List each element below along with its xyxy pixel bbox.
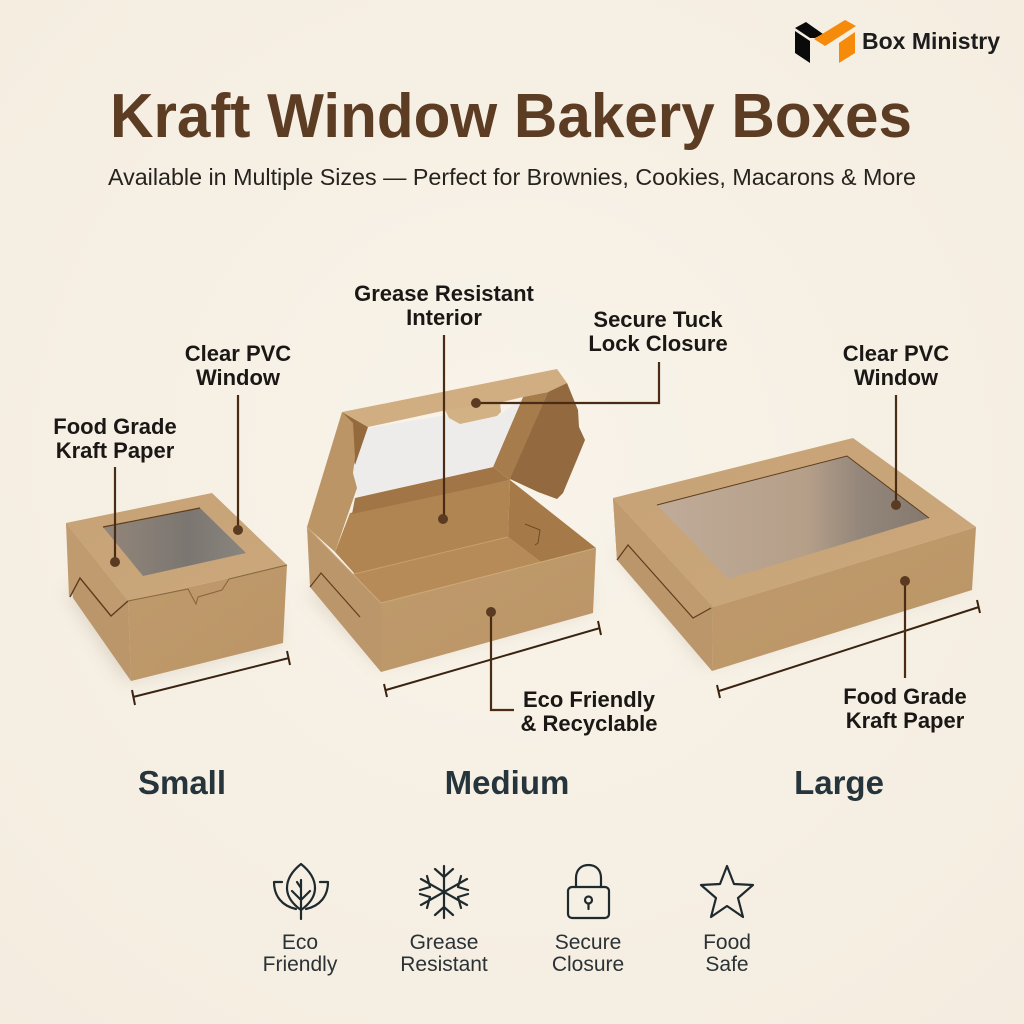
dimension line: small bbox=[132, 651, 290, 705]
icon: star bbox=[701, 866, 753, 917]
callout: clear pvc window, small: Clear PVC bbox=[185, 341, 291, 366]
callout: clear pvc window, small bbox=[185, 341, 291, 535]
callout: food grade kraft paper, small: Kraft Paper bbox=[56, 438, 175, 463]
icon: leaf bbox=[274, 864, 328, 919]
callout: grease resistant interior: Interior bbox=[406, 305, 482, 330]
subtitle: Available in Multiple Sizes — Perfect for Brownies, Cookies, Macarons & More bbox=[108, 164, 916, 190]
feature label: eco friendly: Friendly bbox=[263, 953, 338, 976]
medium box open lid bbox=[307, 369, 585, 552]
feature label: secure closure: Secure bbox=[555, 931, 621, 954]
logo: Box Ministry: Box Ministry bbox=[862, 28, 1000, 54]
feature label: secure closure bbox=[552, 931, 624, 976]
dimension line: medium bbox=[384, 621, 601, 697]
title: Kraft Window Bakery Boxes bbox=[110, 82, 912, 151]
callout: eco friendly and recyclable bbox=[486, 607, 657, 736]
size label: medium: Medium bbox=[445, 764, 569, 801]
feature label: grease resistant bbox=[400, 931, 488, 976]
callout: food grade kraft paper, small bbox=[53, 414, 177, 567]
icon: snowflake bbox=[420, 866, 468, 918]
callout: food grade kraft paper, small: Food Grade bbox=[53, 414, 177, 439]
callout: food grade kraft paper, large bbox=[843, 576, 967, 733]
feature label: eco friendly bbox=[263, 931, 338, 976]
logo: Box Ministry bbox=[795, 20, 1000, 63]
callout: secure tuck lock closure: Secure Tuck bbox=[593, 307, 723, 332]
callout: clear pvc window, large: Clear PVC bbox=[843, 341, 949, 366]
callout: food grade kraft paper, large: Food Grade bbox=[843, 684, 967, 709]
callout: clear pvc window, large: Window bbox=[854, 365, 939, 390]
callout: eco friendly and recyclable: & Recyclable bbox=[521, 711, 657, 736]
callout: grease resistant interior: Grease Resistant bbox=[354, 281, 535, 306]
feature label: grease resistant: Resistant bbox=[400, 953, 488, 976]
icon: padlock bbox=[568, 865, 609, 918]
medium box interior bbox=[335, 480, 596, 603]
callout: secure tuck lock closure: Lock Closure bbox=[588, 331, 728, 356]
small box bbox=[65, 493, 287, 681]
feature label: grease resistant: Grease bbox=[410, 931, 478, 954]
callout: food grade kraft paper, large: Kraft Paper bbox=[846, 708, 965, 733]
feature label: eco friendly: Eco bbox=[282, 931, 318, 954]
feature label: food safe: Safe bbox=[705, 953, 749, 976]
callout: secure tuck lock closure bbox=[471, 307, 728, 408]
dimension line: large bbox=[717, 600, 980, 698]
large box bbox=[613, 438, 976, 671]
feature label: secure closure: Closure bbox=[552, 953, 624, 976]
callout: eco friendly and recyclable: Eco Friendly bbox=[523, 687, 656, 712]
size label: small: Small bbox=[138, 764, 226, 801]
callout: clear pvc window, large bbox=[843, 341, 949, 510]
feature label: food safe: Food bbox=[703, 931, 751, 954]
callout: grease resistant interior bbox=[354, 281, 535, 524]
feature label: food safe bbox=[703, 931, 751, 976]
size label: large: Large bbox=[794, 764, 884, 801]
callout: clear pvc window, small: Window bbox=[196, 365, 281, 390]
medium box bbox=[305, 369, 596, 672]
